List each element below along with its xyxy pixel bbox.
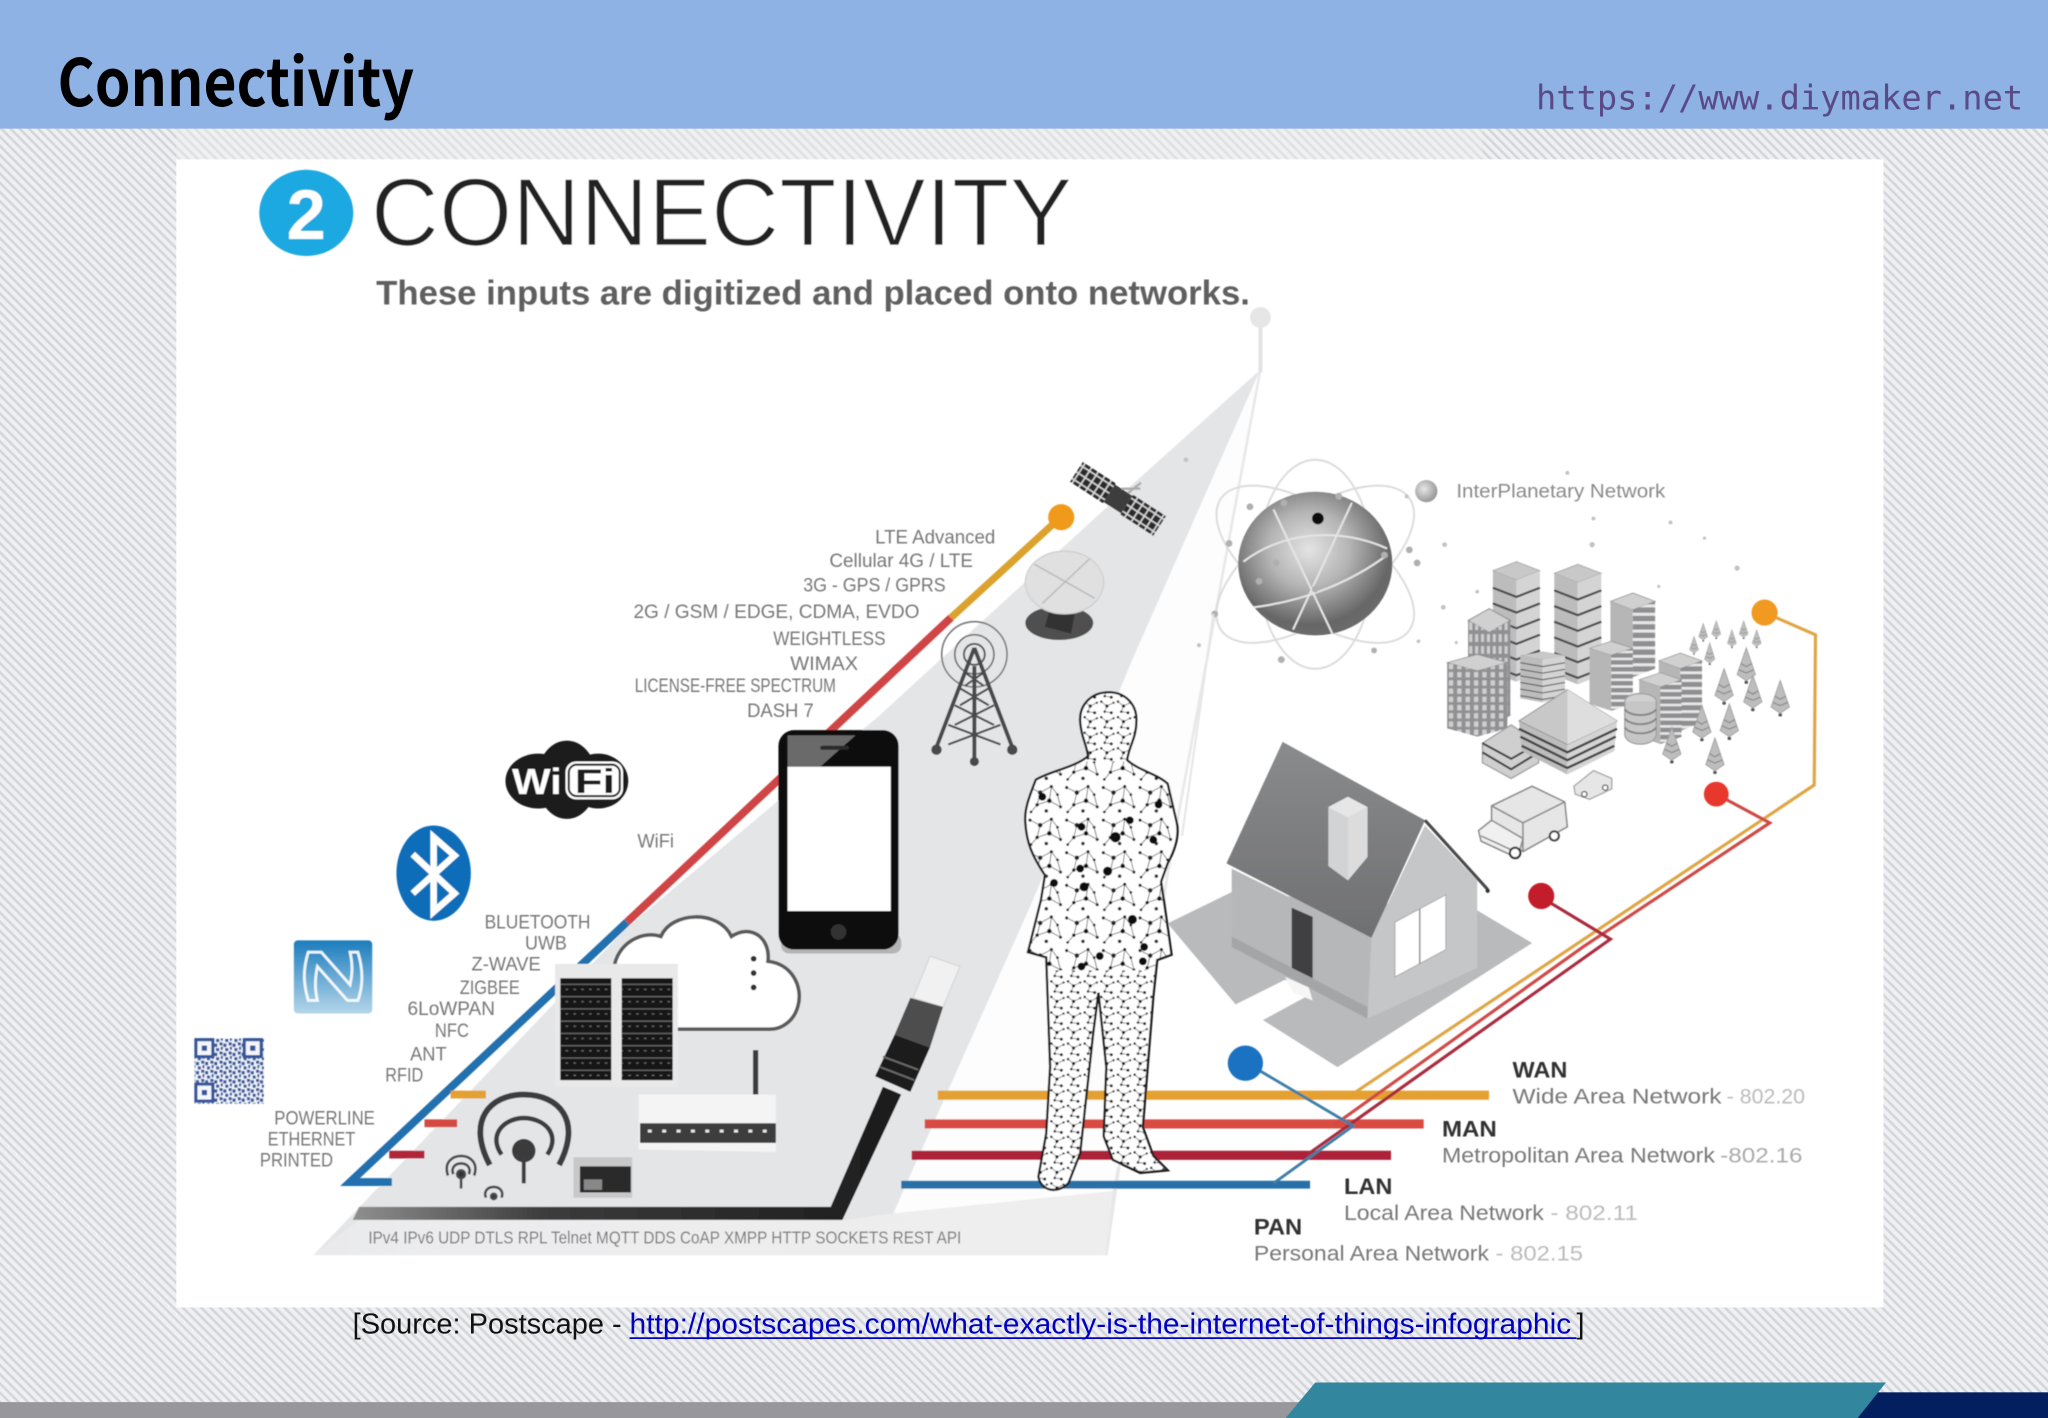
wireless protocol labels: 2G / GSM / EDGE, CDMA, EVDO bbox=[633, 602, 920, 623]
wireless protocol labels: BLUETOOTH bbox=[485, 913, 590, 934]
icon: router bbox=[639, 1050, 776, 1152]
heading: CONNECTIVITY: CONNECTIVITY bbox=[371, 160, 1072, 267]
icon: ethernet socket bbox=[573, 1157, 632, 1198]
icon: bluetooth bbox=[396, 825, 471, 921]
label: LAN: Local Area Network bbox=[1344, 1200, 1544, 1225]
icon: small wireless signal bbox=[447, 1156, 502, 1199]
label: PAN: - 802.15 bbox=[1496, 1240, 1583, 1265]
subtitle: These inputs are digitized and placed onto networks. bbox=[376, 274, 1250, 312]
wireless protocol labels: LTE Advanced bbox=[875, 527, 995, 548]
wireless protocol labels: NFC bbox=[435, 1021, 469, 1042]
icon: phone bbox=[778, 730, 901, 953]
wireless protocol labels bbox=[260, 527, 995, 1171]
slide title: Connectivity bbox=[57, 30, 414, 125]
wireless protocol labels: WiFi bbox=[637, 832, 674, 853]
label: LAN: LAN bbox=[1344, 1174, 1392, 1199]
wireless protocol labels: Z-WAVE bbox=[472, 954, 541, 975]
network labels bbox=[1254, 1058, 1805, 1265]
wireless protocol labels: POWERLINE bbox=[274, 1109, 375, 1130]
ethernet cable and plug bbox=[353, 956, 960, 1220]
node: WAN bbox=[1752, 600, 1778, 626]
icon: satellite bbox=[1070, 450, 1174, 536]
icon: satellite dish bbox=[1025, 551, 1104, 640]
icon: wifi logo bbox=[505, 741, 628, 819]
lighter top strip bbox=[176, 128, 1482, 159]
wireless protocol labels: ZIGBEE bbox=[460, 978, 520, 999]
diagonal wireless cable bbox=[350, 504, 1074, 1182]
icon: wifi logo: Wi bbox=[512, 761, 562, 802]
wireless protocol labels: WEIGHTLESS bbox=[773, 629, 886, 650]
header bar bbox=[0, 0, 2048, 129]
icon: cell tower bbox=[932, 622, 1017, 765]
wireless protocol labels: LICENSE-FREE SPECTRUM bbox=[635, 676, 836, 697]
badge: number 2 bbox=[259, 170, 353, 256]
icon: truck bbox=[1479, 786, 1567, 858]
wireless protocol labels: 6LoWPAN bbox=[408, 999, 495, 1020]
node: LAN bbox=[1528, 883, 1554, 909]
thin line to globe bbox=[1182, 614, 1213, 836]
label: WAN: Wide Area Network bbox=[1512, 1084, 1722, 1109]
icon: globe with orbits bbox=[1191, 456, 1439, 673]
source citation: [Source: Postscape - bbox=[353, 1309, 622, 1341]
label: LAN bbox=[1344, 1174, 1638, 1225]
protocol list: IPv4 IPv6 UDP DTLS RPL Telnet MQTT DDS CoAP XMPP HTTP SOCKETS REST API bbox=[368, 1227, 961, 1247]
icon: small planet bbox=[1415, 480, 1437, 502]
figure: networked man bbox=[1019, 686, 1182, 1199]
node: MAN bbox=[1704, 782, 1729, 807]
wireless protocol labels: UWB bbox=[525, 934, 567, 955]
icon: van bbox=[1574, 771, 1612, 799]
wireless protocol labels: WIMAX bbox=[790, 654, 859, 675]
wireless protocol labels: DASH 7 bbox=[747, 701, 814, 722]
label: MAN: Metropolitan Area Network bbox=[1442, 1142, 1715, 1167]
label: MAN: MAN bbox=[1442, 1116, 1497, 1141]
wireless protocol labels: 3G - GPS / GPRS bbox=[803, 576, 946, 597]
label: PAN bbox=[1254, 1214, 1583, 1265]
icon: QR code bbox=[195, 1038, 264, 1104]
panel: infographic image bbox=[176, 159, 1883, 1307]
cloud dots bbox=[751, 956, 757, 990]
source citation: http://postscapes.com/what-exactly-is-the-internet-of-things-infographic bbox=[630, 1309, 1571, 1341]
node: PAN bbox=[1228, 1046, 1263, 1081]
network lines bbox=[901, 613, 1816, 1185]
label: WAN: - 802.20 bbox=[1727, 1084, 1805, 1109]
source citation: ] bbox=[1576, 1309, 1584, 1341]
label: WAN bbox=[1512, 1058, 1805, 1109]
connectivity beam bbox=[313, 307, 1271, 1255]
wireless protocol labels: Cellular 4G / LTE bbox=[829, 551, 973, 572]
label: LAN: - 802.11 bbox=[1550, 1200, 1638, 1225]
icon: cloud bbox=[614, 917, 799, 1029]
label: MAN: -802.16 bbox=[1720, 1142, 1802, 1167]
icon: house bbox=[1168, 742, 1532, 1067]
badge: number 2: 2 bbox=[287, 175, 326, 254]
wireless protocol labels: PRINTED bbox=[260, 1150, 333, 1171]
wireless protocol labels: ETHERNET bbox=[268, 1129, 356, 1150]
label: PAN: PAN bbox=[1254, 1214, 1302, 1239]
icon: server rack bbox=[555, 964, 678, 1087]
icon: large wireless signal bbox=[480, 1095, 568, 1183]
footer bars bbox=[0, 1383, 2048, 1418]
label: MAN bbox=[1442, 1116, 1802, 1167]
stars bbox=[1184, 457, 1740, 647]
wireless protocol labels: ANT bbox=[410, 1045, 447, 1066]
wireless protocol labels: RFID bbox=[385, 1065, 423, 1086]
label: InterPlanetary Network: InterPlanetary Network bbox=[1456, 481, 1666, 503]
icon: NFC bbox=[294, 940, 372, 1014]
website url: https://www.diymaker.net bbox=[1536, 79, 2023, 118]
icon: wifi logo: Fi bbox=[575, 763, 615, 801]
illustration: city bbox=[1447, 562, 1789, 778]
label: WAN: WAN bbox=[1512, 1058, 1567, 1083]
label: PAN: Personal Area Network bbox=[1254, 1240, 1489, 1265]
